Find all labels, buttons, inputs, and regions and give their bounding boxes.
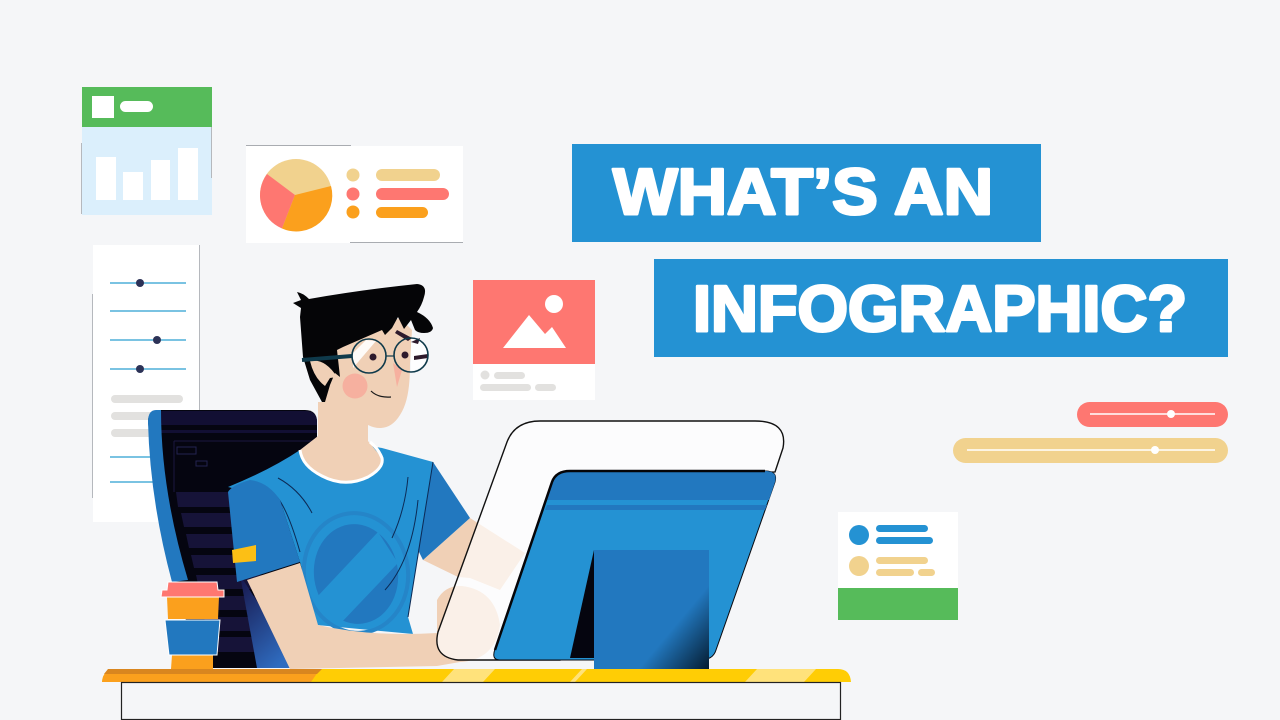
- office chair: [148, 410, 317, 668]
- shirt body: [228, 444, 433, 634]
- nose: [393, 363, 402, 387]
- monitor back: [494, 471, 776, 669]
- slider: red pill: [1077, 402, 1228, 427]
- stand shadow: [570, 550, 594, 658]
- panel: image card: [473, 280, 595, 400]
- armband: [232, 545, 256, 563]
- panel: pie chart card: [246, 146, 463, 243]
- desk frame: [122, 682, 840, 720]
- slider: yellow pill: [953, 438, 1228, 463]
- neck and face: [300, 318, 412, 482]
- cheek: [342, 374, 368, 398]
- panel: bar chart card: [82, 87, 212, 215]
- eyebrow and lens details: [395, 330, 428, 360]
- title line 2: INFOGRAPHIC?: [654, 259, 1228, 357]
- coffee cup: [161, 582, 224, 669]
- panel: slider list card: [92, 245, 200, 522]
- arm and hand: [247, 563, 500, 669]
- collar: [300, 442, 382, 482]
- panel: profile card: [838, 512, 958, 620]
- character: [228, 284, 525, 669]
- far arm: [423, 518, 525, 590]
- glasses: [302, 338, 428, 373]
- title line 1: WHAT'S AN: [572, 144, 1041, 242]
- ear: [310, 361, 337, 386]
- eyes: [370, 352, 408, 360]
- shirt sleeve right: [418, 462, 470, 560]
- shirt sleeve left: [228, 480, 300, 582]
- smile: [371, 391, 391, 397]
- hair: [293, 284, 433, 402]
- desk top: [102, 669, 851, 682]
- title line 1: WHAT'S AN: WHAT’S AN: [613, 155, 993, 228]
- shirt fold lines: [277, 462, 433, 617]
- shirt emblem: [296, 506, 416, 640]
- monitor glass screen: [437, 421, 784, 660]
- title line 2: INFOGRAPHIC?: INFOGRAPHIC?: [693, 272, 1187, 345]
- lens glare: [353, 339, 428, 371]
- stand: [594, 550, 709, 669]
